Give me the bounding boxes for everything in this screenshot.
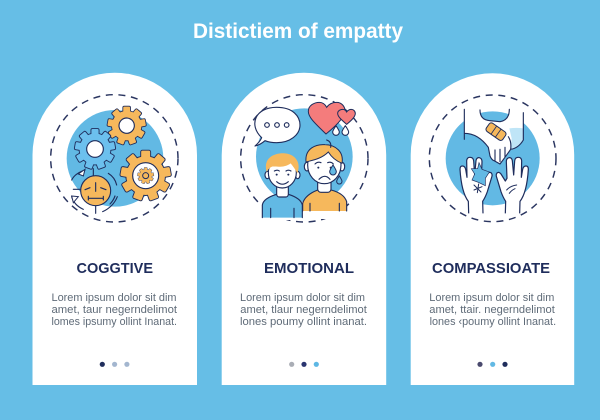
card background xyxy=(411,73,574,385)
panel: compassionate xyxy=(411,73,574,385)
pagination dots xyxy=(289,362,319,367)
body text xyxy=(240,292,368,328)
icon: handshake and open hands xyxy=(429,95,556,222)
body text: Lorem ipsum dolor sit dim xyxy=(429,292,554,304)
pagination dots xyxy=(100,362,130,367)
icon: gears and head xyxy=(51,95,178,222)
heading: COGGTIVE xyxy=(76,260,153,277)
left hand xyxy=(460,157,492,213)
card background xyxy=(222,73,386,385)
heading: EMOTIONAL xyxy=(264,260,354,277)
card background xyxy=(32,73,197,385)
body text: amet, taur negerndelimot xyxy=(52,304,178,316)
body text: lomes ipsumy ollint Inanat. xyxy=(52,316,177,328)
pagination dots xyxy=(477,362,508,367)
body text: lones ‹poumy ollint Inanat. xyxy=(430,316,556,328)
title: Distictiem of empatty xyxy=(193,20,403,43)
body text xyxy=(429,292,556,328)
girl xyxy=(303,190,347,211)
right hand xyxy=(496,157,528,213)
heading: COMPASSIOATE xyxy=(432,260,550,277)
boy xyxy=(262,194,302,218)
body text xyxy=(52,292,178,328)
panel: emotional xyxy=(222,73,386,385)
body text: lones poumy ollint inanat. xyxy=(240,316,367,328)
body text: amet, tlaur negerndelimot xyxy=(240,304,368,316)
icon: two people, speech bubble and hearts xyxy=(241,95,368,222)
body text: Lorem ipsum dolor sit dim xyxy=(52,292,176,304)
body text: Lorem ipsum dolor sit dim xyxy=(240,292,365,304)
body text: amet, ttair. negerndelimot xyxy=(429,304,556,316)
handshake xyxy=(464,109,523,163)
panel: cognitive xyxy=(32,73,197,385)
